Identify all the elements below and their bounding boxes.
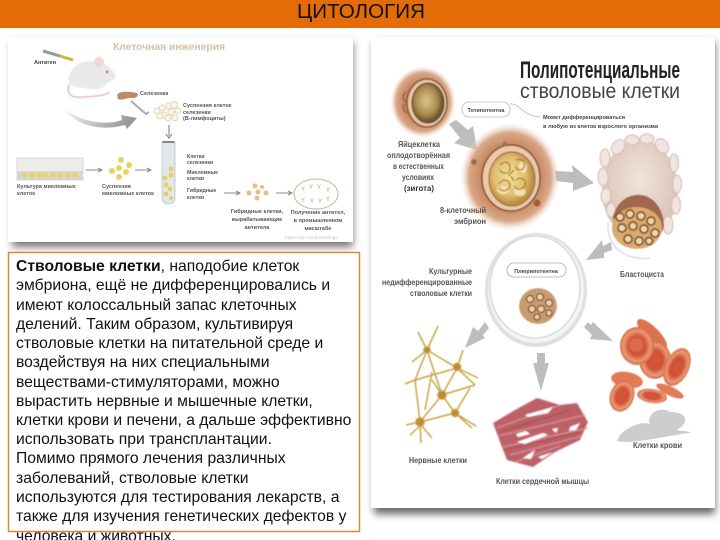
culture label: недифференцированные: [382, 277, 472, 287]
antibody vessel: Y: [309, 185, 313, 191]
culture label: [17, 184, 77, 197]
text box: stem cells description: Помимо прямого лечения различных: [16, 450, 286, 467]
antibody label: в промышленном: [294, 218, 342, 224]
text box: stem cells description: Стволовые клетки, наподобие клеток: [16, 258, 299, 275]
culture dish: [17, 158, 83, 180]
hybrid cells: [246, 184, 268, 200]
antigen label: Антиген: [34, 60, 56, 66]
icon: syringe: [43, 51, 73, 60]
arrow: tube to hybrids: [224, 191, 240, 195]
antibody vessel: Y: [301, 187, 305, 193]
tube labels: Гибридные: [187, 187, 216, 194]
antibody vessel: Y: [326, 197, 330, 203]
test tube: [162, 141, 175, 204]
spleen cell suspension: [154, 102, 181, 121]
arrow: blastocyst to dish: [586, 240, 612, 260]
text box: stem cells description: стволовые клетки на питательной среде и: [16, 335, 323, 352]
arrow: dish to nerve cells: [465, 322, 489, 348]
zygote label: оплодотворённая: [387, 150, 450, 160]
hybrid label: антитела: [245, 225, 270, 231]
text box: stem cells description: заболеваний, стволовые клетки: [16, 470, 248, 487]
text box: stem cells description: имеют колоссальный запас клеточных: [16, 297, 297, 314]
hybrid label: Гибридные клетки,: [231, 208, 284, 215]
panel: pluripotent stem cells diagram: [371, 37, 715, 514]
diagram heading: стволовые клетки: [520, 80, 680, 103]
embryo label: 8-клеточный: [440, 205, 486, 215]
blastocyst label: Бластоциста: [620, 269, 664, 279]
culture label: стволовые клетки: [410, 288, 472, 298]
hybrid label: [231, 208, 284, 231]
icon: nerve cells: [405, 326, 478, 443]
hybrid label: вырабатывающие: [232, 216, 282, 223]
source caption: https://vk.com/biotehlogo: [285, 235, 338, 241]
text box: stem cells description: используются для тестирования лекарств, а: [16, 489, 340, 506]
big curved arrow: [62, 107, 137, 129]
arrow: down to tube: [166, 125, 172, 138]
culture label: клеток: [17, 191, 35, 197]
suspension label: [183, 103, 232, 122]
tube labels: [187, 154, 218, 201]
panel: cell engineering diagram: [8, 37, 353, 247]
tube labels: Миеломные: [187, 170, 218, 176]
text box: stem cells description: эмбриона, ещё не дифференцировались и: [16, 277, 330, 294]
myeloma label: миеломных клеток: [102, 191, 154, 197]
text box: stem cells description: [8, 252, 360, 540]
spleen label: Селезенка: [140, 91, 169, 97]
embryo label: [440, 205, 486, 226]
arrow: zygote to embryo: [449, 120, 477, 150]
antibody vessel: Y: [301, 198, 305, 204]
icon: zygote: [390, 66, 456, 138]
totipotent pill: [462, 102, 540, 117]
tube labels: клетки: [187, 195, 204, 201]
culture label: Культурные: [429, 266, 472, 276]
antibody label: масштабе: [305, 225, 331, 232]
header bar: [0, 0, 720, 28]
suspension label: (В-лимфоциты): [183, 115, 226, 122]
arrow: dish to heart cells: [533, 353, 549, 391]
pluripotent pill: Плюрипотентна: [514, 269, 559, 275]
pluripotent pill: [507, 263, 566, 277]
text box: stem cells description: также для изучения генетических дефектов у: [16, 508, 347, 525]
icon: blood cells: [605, 315, 696, 442]
totipotent pill: Тотипотентна: [467, 108, 505, 114]
shadow of blood cells: [617, 410, 690, 442]
icon: 8-cell embryo: [460, 123, 560, 231]
zygote label: Яйцеклетка: [398, 139, 440, 149]
zygote label: в естественных: [393, 161, 444, 171]
arrow: hybrids to antibodies: [276, 191, 292, 195]
blood label: Клетки крови: [633, 440, 682, 450]
text box: stem cells description: клетки крови и печени, а дальше эффективно: [16, 412, 352, 429]
nerve label: Нервные клетки: [409, 455, 467, 465]
antibody vessel: Y: [310, 199, 314, 205]
myeloma label: Суспензия: [102, 184, 131, 190]
arrow: embryo to blastocyst: [555, 165, 594, 191]
myeloma cells: [109, 157, 132, 180]
icon: mouse: [68, 57, 116, 97]
totipotent note: в любую из клеток взрослого организма: [543, 123, 659, 130]
diagram heading: Клеточная инженерия: [113, 41, 225, 53]
antibody vessel: Y: [326, 188, 330, 194]
tube labels: селезенки: [187, 160, 213, 166]
heart muscle label: Клетки сердечной мышцы: [496, 476, 589, 486]
text box: stem cells description: вырастить нервные и мышечные клетки,: [16, 393, 313, 410]
antibody vessel: Y: [317, 185, 321, 191]
totipotent note: [543, 114, 659, 130]
tube labels: Клетки: [187, 154, 205, 160]
myeloma label: [102, 184, 154, 197]
text box: stem cells description: веществами-стимуляторами, можно: [16, 374, 280, 391]
text box: stem cells description: делений. Таким образом, культивируя: [16, 316, 293, 333]
arrow: dish to suspension: [86, 168, 102, 172]
arrow: dish to blood cells: [584, 322, 613, 341]
antibody label: [291, 210, 346, 232]
totipotent note: Может дифференцироваться: [543, 114, 625, 121]
suspension label: Суспензия клеток: [183, 103, 232, 109]
zygote label: (зигота): [404, 183, 434, 193]
diagram heading: [520, 57, 680, 103]
culture label: Культура миеломных: [17, 184, 77, 190]
suspension label: селезенки: [183, 110, 211, 116]
text box: stem cells description: воздействуя на них специальными: [16, 354, 269, 371]
antibody vessel: Y: [318, 199, 322, 205]
icon: petri dish: [485, 233, 587, 347]
icon: spleen: [117, 92, 138, 100]
antibody label: Получение антител,: [291, 210, 346, 216]
icon: heart muscle: [493, 398, 588, 467]
culture label: [382, 266, 472, 298]
embryo label: эмбрион: [454, 216, 486, 226]
icon: blastocyst: [598, 134, 682, 258]
zygote label: [387, 139, 450, 193]
title: ЦИТОЛОГИЯ: [297, 1, 425, 23]
zygote label: условиях: [402, 172, 434, 182]
antibody vessel: [294, 179, 338, 209]
arrow: spleen to suspension: [131, 101, 149, 114]
tube labels: клетки: [187, 176, 204, 182]
text box: stem cells description: использовать при трансплантации.: [16, 431, 272, 448]
arrow: suspension to tube: [135, 168, 151, 172]
